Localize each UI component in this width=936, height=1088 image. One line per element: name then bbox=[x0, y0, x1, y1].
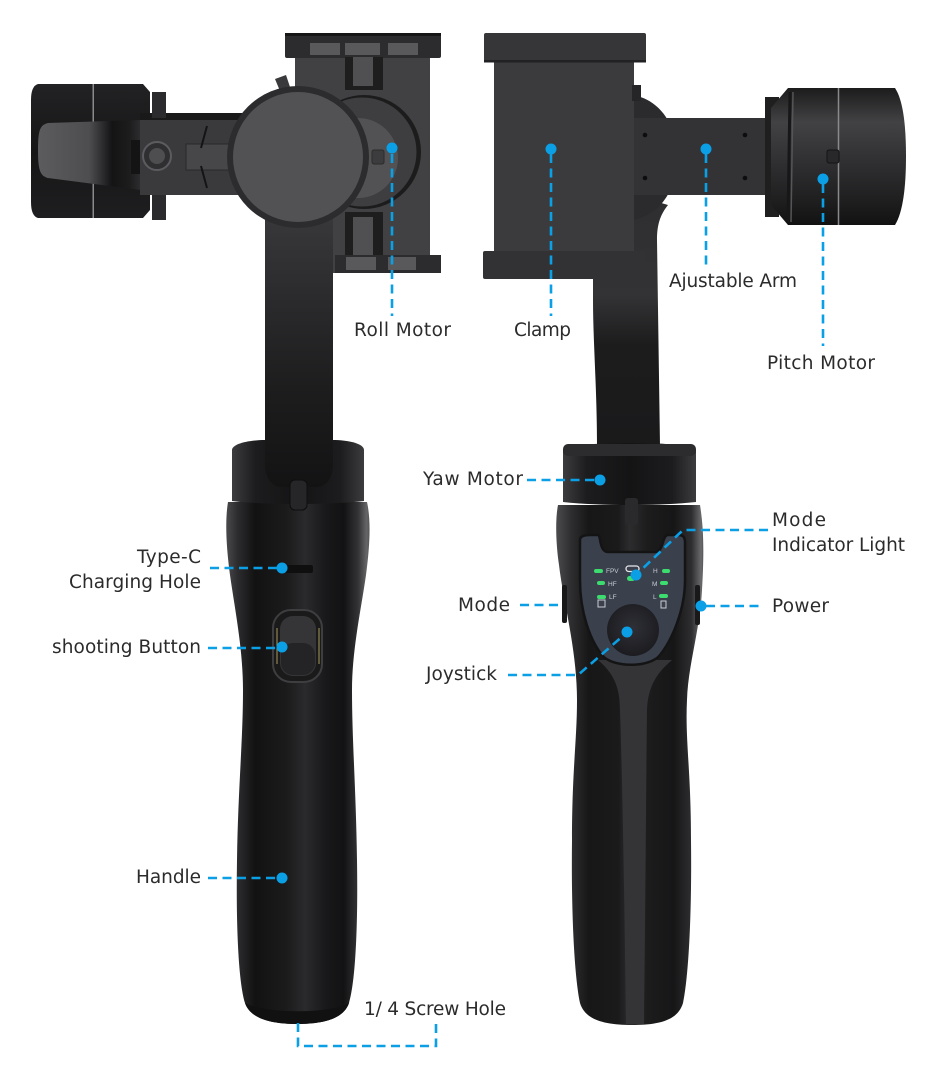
callout: mode indicator light: Mode bbox=[772, 510, 826, 531]
callout: clamp: Clamp bbox=[514, 320, 571, 341]
joystick bbox=[607, 604, 659, 656]
stem behind clamp bbox=[593, 195, 668, 446]
callout: clamp bbox=[514, 144, 571, 341]
adjustable arm bbox=[634, 118, 766, 195]
roll motor disc bbox=[227, 86, 369, 228]
arm and tab bbox=[131, 75, 290, 220]
callout: power: Power bbox=[772, 596, 829, 617]
indicator lights: LF bbox=[609, 594, 617, 601]
callout: screw hole: 1/ 4 Screw Hole bbox=[364, 999, 506, 1020]
indicator lights: FPV bbox=[606, 568, 619, 575]
pitch motor left view bbox=[31, 84, 150, 218]
callout: power bbox=[696, 596, 829, 617]
callout: roll motor bbox=[354, 142, 451, 341]
callout: type-c charging hole: Type-C bbox=[136, 547, 201, 568]
disc behind arm bbox=[633, 95, 677, 220]
callout: joystick bbox=[425, 626, 632, 685]
indicator lights: L bbox=[653, 594, 657, 601]
indicator lights: H bbox=[653, 568, 658, 575]
clamp bbox=[483, 33, 646, 279]
callout: pitch motor: Pitch Motor bbox=[767, 353, 875, 374]
callout: mode indicator light bbox=[630, 510, 905, 580]
pitch motor bbox=[765, 88, 906, 225]
left gimbal (rear view) bbox=[31, 33, 441, 1024]
callout: pitch motor bbox=[767, 174, 875, 374]
vertical stem bbox=[265, 205, 333, 487]
callout: type-c charging hole bbox=[69, 547, 288, 593]
mode panel bbox=[580, 535, 685, 665]
right gimbal (front view) bbox=[483, 33, 906, 1025]
callout: shooting button: shooting Button bbox=[52, 637, 201, 658]
callout: adjustable arm bbox=[669, 144, 797, 292]
callout: shooting button bbox=[52, 637, 288, 658]
indicator lights: M bbox=[652, 581, 657, 588]
callout: mode button bbox=[458, 595, 560, 616]
callout: yaw motor bbox=[422, 469, 606, 490]
tab on stem bbox=[290, 480, 307, 510]
roll motor clamp back bbox=[285, 33, 441, 273]
callout: mode indicator light: Indicator Light bbox=[772, 535, 905, 556]
callout: screw hole bbox=[298, 999, 506, 1046]
callout: adjustable arm: Ajustable Arm bbox=[669, 271, 797, 292]
callout: mode button: Mode bbox=[458, 595, 510, 616]
handle rear view bbox=[226, 440, 370, 1024]
callout: handle: Handle bbox=[136, 867, 201, 888]
handle front view bbox=[556, 443, 703, 1025]
callout: yaw motor: Yaw Motor bbox=[422, 469, 523, 490]
callout: type-c charging hole: Charging Hole bbox=[69, 572, 201, 593]
callout: roll motor: Roll Motor bbox=[354, 320, 451, 341]
callout: joystick: Joystick bbox=[425, 664, 497, 685]
indicator lights bbox=[594, 566, 670, 608]
indicator lights: HF bbox=[608, 581, 617, 588]
callout: handle bbox=[136, 867, 288, 888]
